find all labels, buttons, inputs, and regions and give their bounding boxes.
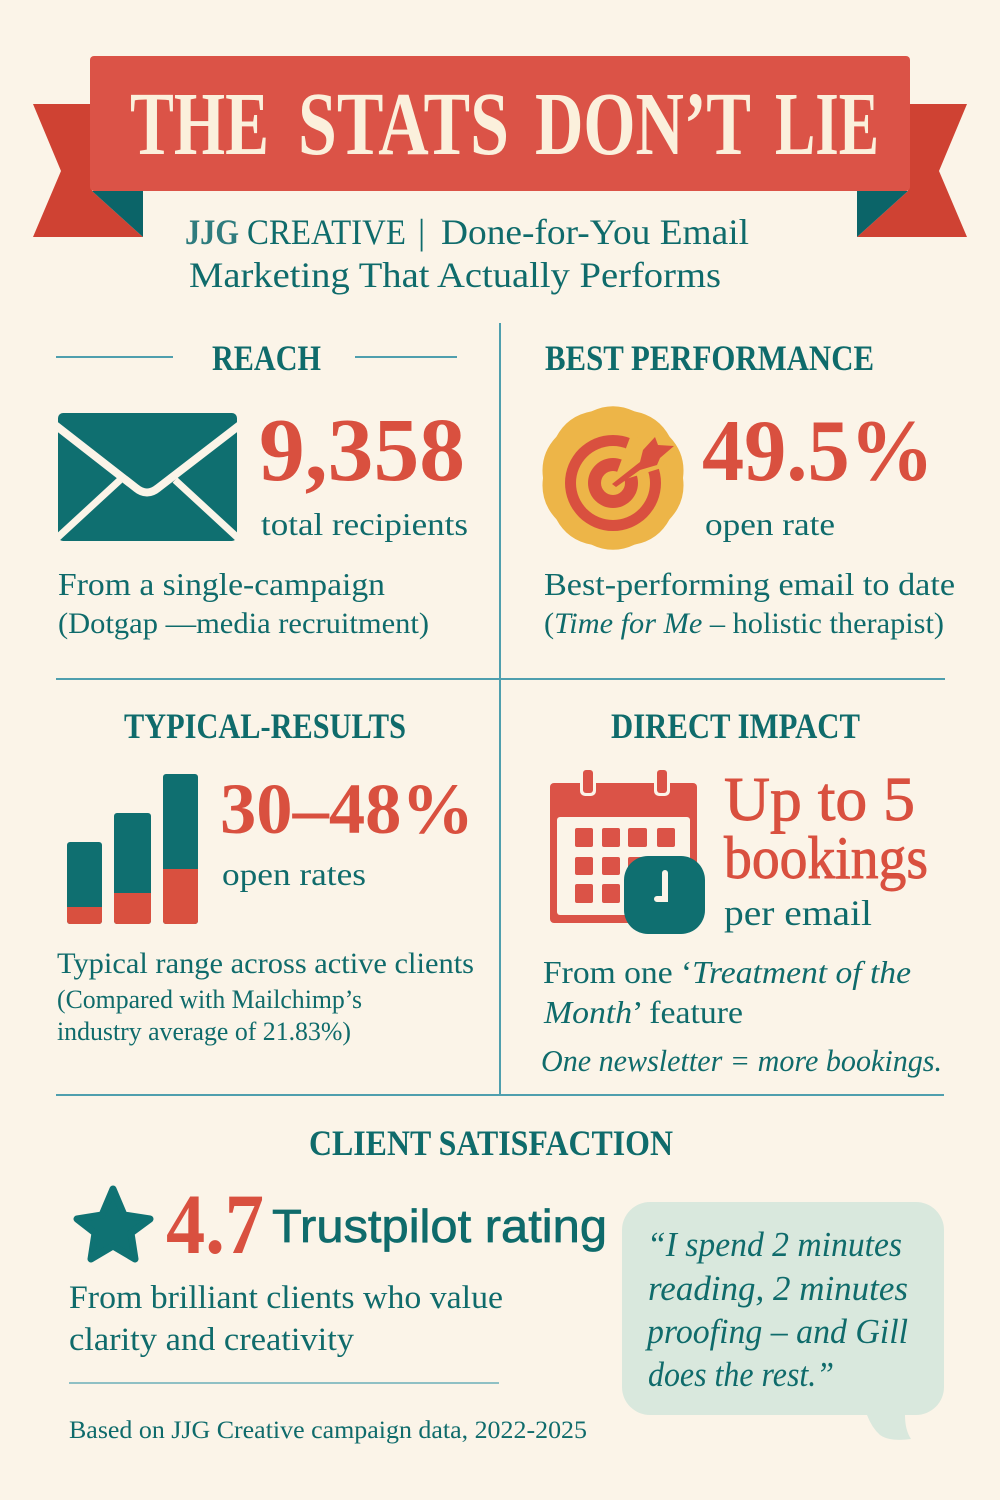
- stat: 9,358: 9,358: [259, 401, 465, 500]
- subtitle: CREATIVE: [247, 212, 406, 252]
- stat label: open rates: open rates: [222, 856, 366, 892]
- description: best performance: (Time for Me – holistic therapist): [544, 607, 944, 640]
- title banner: STATS: [298, 75, 509, 174]
- description: typical results: (Compared with Mailchimp’s: [57, 985, 362, 1014]
- description: typical results: industry average of 21.83%): [57, 1017, 351, 1046]
- quote bubble: does the rest.”: [648, 1355, 834, 1394]
- title banner: THE: [130, 75, 269, 174]
- description: satisfaction: clarity and creativity: [69, 1322, 355, 1358]
- quote bubble: “I spend 2 minutes: [647, 1225, 902, 1264]
- quote bubble: [622, 1202, 944, 1440]
- subtitle: JJG: [185, 212, 239, 252]
- footnote: Based on JJG Creative campaign data, 2022-2025: [69, 1417, 587, 1444]
- description: direct impact: [541, 954, 942, 1078]
- stat: 49.5%: 49.5%: [702, 403, 934, 500]
- panel: typical results: [57, 706, 474, 1046]
- title banner: [33, 56, 967, 237]
- panel: client satisfaction: [69, 1123, 944, 1444]
- title banner: LIE: [775, 75, 879, 174]
- icon: star: [77, 1189, 150, 1259]
- description: typical results: Typical range across active clients: [57, 947, 474, 980]
- description: direct impact: From one ‘Treatment of the: [543, 954, 911, 990]
- description: direct impact: Month’ feature: [543, 994, 743, 1030]
- subtitle: |: [418, 212, 425, 252]
- heading: direct impact: DIRECT IMPACT: [611, 706, 860, 746]
- stat: up to 5 bookings: bookings: [724, 825, 928, 891]
- description: reach: (Dotgap —media recruitment): [58, 607, 429, 640]
- stat label: total recipients: total recipients: [261, 506, 468, 542]
- quote bubble: proofing – and Gill: [644, 1312, 908, 1351]
- stat label: Trustpilot rating: Trustpilot rating: [272, 1200, 607, 1252]
- description: typical results: [57, 947, 474, 1046]
- description: reach: From a single-campaign: [58, 566, 385, 602]
- panel: direct impact: [541, 706, 942, 1078]
- quote bubble: reading, 2 minutes: [648, 1269, 908, 1308]
- subtitle: Marketing That Actually Performs: [189, 255, 721, 295]
- icon: calendar with clock: [550, 767, 705, 934]
- bar chart icon: [67, 774, 198, 924]
- description: satisfaction: From brilliant clients who value: [69, 1280, 503, 1316]
- description: best performance: [544, 566, 955, 640]
- heading: best performance: BEST PERFORMANCE: [545, 338, 874, 378]
- stat: up to 5 bookings: Up to 5: [724, 766, 915, 834]
- heading: client satisfaction: CLIENT SATISFACTION: [309, 1123, 673, 1163]
- title banner: DON’T: [535, 75, 751, 174]
- description: reach: [58, 566, 429, 640]
- subtitle: Done-for-You Email: [441, 212, 749, 252]
- stat: up to 5 bookings: [724, 766, 928, 891]
- stat label: per email: per email: [724, 893, 872, 933]
- icon: target badge: [542, 406, 684, 550]
- stat label: open rate: open rate: [705, 506, 835, 542]
- subtitle: [185, 212, 749, 295]
- panel: best performance: [542, 338, 955, 640]
- heading: reach: REACH: [212, 338, 321, 378]
- description: best performance: Best-performing email to date: [544, 566, 955, 602]
- stat: 4.7: 4.7: [166, 1176, 264, 1272]
- icon: envelope: [50, 413, 245, 541]
- stat: 30–48%: 30–48%: [220, 769, 474, 849]
- description: direct impact: One newsletter = more bookings.: [541, 1043, 942, 1078]
- heading: typical results: TYPICAL-RESULTS: [124, 706, 406, 746]
- description: satisfaction: [69, 1280, 503, 1358]
- panel: reach: [50, 338, 468, 640]
